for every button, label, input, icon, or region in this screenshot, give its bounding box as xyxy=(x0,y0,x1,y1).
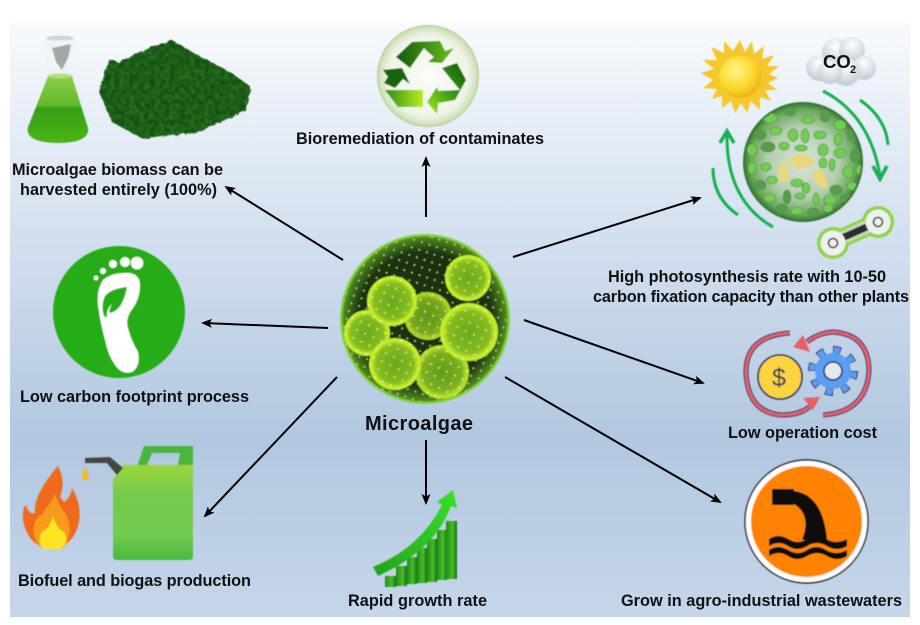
arrow: to wastewater xyxy=(505,377,720,502)
arrow: to growth xyxy=(425,440,427,503)
text: biomass label: harvested entirely (100%) xyxy=(20,181,217,199)
text: biofuel label: Biofuel and biogas production xyxy=(18,572,251,590)
icon: flame xyxy=(23,466,80,549)
text: bioremediation label: Bioremediation of contaminates xyxy=(296,130,544,148)
icon: footprint in green circle xyxy=(53,246,185,378)
text: photosynthesis label xyxy=(593,268,909,306)
text: central title: Microalgae xyxy=(365,413,473,435)
text: photosynthesis label: carbon fixation capacity than other plants xyxy=(593,288,909,306)
text: footprint label: Low carbon footprint process xyxy=(20,388,249,406)
icon: central microalgae colony xyxy=(340,234,510,404)
icon: fuel can with spout xyxy=(82,446,193,560)
arrow: to photosynthesis xyxy=(513,198,700,257)
text: biomass label xyxy=(12,161,223,199)
icon: CO2 cloud: CO xyxy=(823,51,851,72)
text: biomass label: Microalgae biomass can be xyxy=(12,161,223,179)
icon: CO2 cloud: 2 xyxy=(850,64,856,76)
arrow: to bioremediation xyxy=(425,158,427,217)
icon: CO2 cloud xyxy=(806,37,876,86)
text: operation cost label: Low operation cost xyxy=(728,424,878,442)
icon: flask with green culture xyxy=(27,36,88,143)
icon: operation cost cycle: $ xyxy=(772,364,786,392)
icon: operation cost cycle xyxy=(746,332,869,415)
icon: growth chart with arrow xyxy=(373,490,457,587)
arrow: to biomass xyxy=(226,187,343,260)
icon: green cycle arrows xyxy=(713,91,888,227)
arrow: to operation cost xyxy=(524,320,703,383)
icon: biomass powder heap xyxy=(99,40,251,139)
icon: wastewater discharge xyxy=(745,460,868,583)
icon: green algal cell xyxy=(743,102,864,222)
text: wastewater label: Grow in agro-industrial wastewaters xyxy=(621,592,902,610)
icon: CO2 molecule xyxy=(817,206,894,259)
text: photosynthesis label: High photosynthesis rate with 10-50 xyxy=(608,268,886,286)
icon: recycle symbol xyxy=(377,25,479,127)
arrows radiating from centre xyxy=(203,158,720,516)
arrow: to footprint xyxy=(203,323,328,328)
icon: sun xyxy=(701,40,779,113)
text: growth label: Rapid growth rate xyxy=(348,592,487,610)
arrow: to biofuel xyxy=(205,377,337,516)
